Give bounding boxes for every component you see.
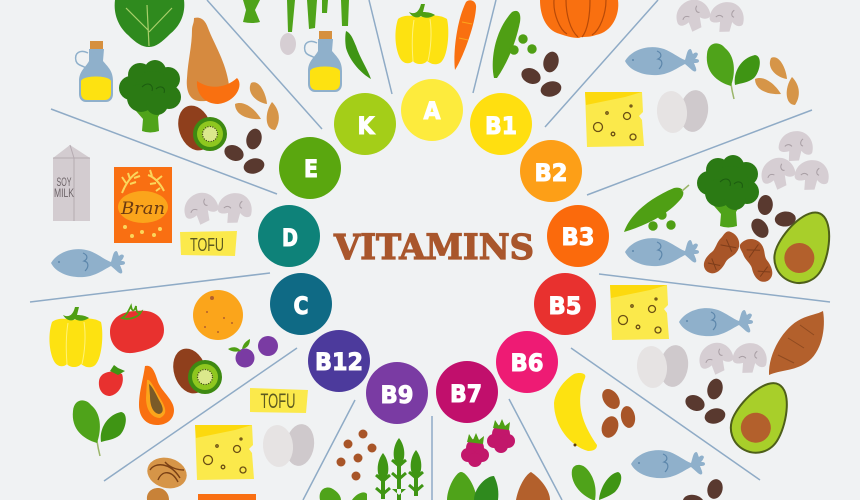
icon: mushroom top [777, 129, 815, 164]
icon: cheese [585, 92, 644, 147]
title: VITAMINS [333, 227, 534, 268]
icon: peanut left [699, 229, 745, 278]
icon: banana [554, 373, 597, 451]
icon: eggs [655, 88, 711, 134]
icon: eggs [635, 343, 691, 389]
icon: cheese [195, 425, 254, 480]
icon: brown seeds [336, 430, 376, 480]
vitamin K: K [358, 112, 376, 140]
icon: soy milk carton: SOY [56, 175, 72, 189]
icon: peas [648, 210, 676, 231]
icon: asparagus [376, 438, 423, 500]
vitamin C [270, 273, 332, 335]
icon: mushroom right [792, 157, 831, 194]
foods: vitamin K sector [243, 0, 371, 92]
icon: peas [509, 34, 537, 55]
vitamin A [401, 79, 463, 141]
icon: mushroom right [730, 340, 769, 377]
icon: sweet potato [769, 311, 824, 375]
icon: spinach [320, 488, 367, 500]
icon: spinach [707, 43, 760, 99]
vitamin C: C [294, 292, 308, 320]
icon: carrot [454, 0, 476, 70]
icon: tofu label: TOFU [260, 390, 296, 413]
vitamin circles [258, 79, 609, 424]
icon: raspberries [461, 419, 515, 467]
vitamin B6: B6 [510, 349, 544, 377]
icon: mushroom right [707, 0, 746, 36]
vitamin E: E [304, 155, 318, 183]
foods: vitamin B12 sector [144, 388, 317, 500]
foods: vitamin B1 sector [493, 0, 618, 99]
vitamin D: D [282, 224, 298, 252]
vitamin B1: B1 [485, 112, 517, 140]
icon: kiwi [173, 101, 227, 155]
foods: vitamin D sector [51, 145, 254, 277]
vitamin E [279, 137, 341, 199]
foods: vitamin C sector [49, 290, 278, 456]
icon: fish [679, 308, 753, 336]
icon: pea pod [624, 185, 689, 232]
icon: dark beans [519, 50, 563, 99]
vitamin B9 [366, 362, 428, 424]
icon: yellow pepper [395, 4, 448, 64]
icon: broccoli stem [243, 0, 260, 23]
icon: cheese [610, 285, 669, 340]
icon: fish [625, 47, 699, 75]
foods: vitamin B3 sector [624, 129, 843, 291]
foods: vitamin E sector [76, 0, 279, 176]
icon: dark beans [222, 127, 266, 176]
icon: dark beans [683, 377, 727, 426]
vitamin B5 [534, 273, 596, 335]
icon: dark beans [683, 477, 725, 500]
icon: bran box [114, 167, 172, 243]
vitamin B6 [496, 331, 558, 393]
icon: chili [345, 31, 371, 79]
icon: tofu label [180, 231, 237, 256]
foods: vitamin B7 sector [447, 419, 550, 500]
icon: pea pod [493, 11, 520, 78]
icon: mushroom left [696, 339, 737, 378]
icon: spinach [572, 465, 621, 500]
vitamin B5: B5 [548, 292, 582, 320]
icon: almonds [755, 57, 799, 105]
icon: soy milk carton: MILK [54, 186, 74, 200]
vitamin B7 [436, 361, 498, 423]
icon: mushroom left [673, 0, 714, 35]
icon: yellow pepper [49, 307, 102, 367]
vitamin D [258, 205, 320, 267]
foods: vitamin B6 sector [554, 373, 725, 500]
icon: orange [193, 290, 243, 340]
icon: broccoli [119, 60, 181, 132]
icon: blueberries [228, 336, 278, 368]
icon: avocado [722, 373, 801, 462]
icon: soy milk carton [53, 145, 90, 221]
icon: fish [51, 249, 125, 277]
icon: kiwi [168, 344, 222, 398]
vitamin A: A [424, 97, 441, 125]
icon: dark beans [740, 185, 801, 243]
icon: mushroom left [181, 189, 222, 228]
vitamin B2 [520, 140, 582, 202]
icon: chard leaves [447, 472, 498, 500]
icon: mushroom right [215, 190, 254, 227]
vitamin B9: B9 [380, 381, 414, 409]
icon: avocado [766, 203, 843, 291]
vitamin B12 [308, 330, 370, 392]
icon: fish [625, 238, 699, 266]
foods: vitamin B5 sector [610, 285, 824, 462]
icon: tofu label: TOFU [190, 235, 224, 255]
vitamin B3: B3 [562, 223, 594, 251]
vitamin B12: B12 [315, 348, 363, 376]
foods: vitamin B2 sector [585, 0, 799, 147]
vitamin B2: B2 [534, 159, 568, 187]
foods: vitamin A sector [395, 0, 476, 70]
icon: spinach [73, 400, 126, 456]
vitamin B3 [547, 205, 609, 267]
icon: eggs [261, 422, 317, 468]
icon: kidney beans [599, 386, 637, 440]
icon: fish [631, 450, 705, 478]
icon: tomato [110, 306, 164, 353]
icon: clam [144, 453, 190, 493]
foods: vitamin B9 sector [320, 430, 423, 500]
vitamin B7: B7 [450, 380, 482, 408]
icon: bran box top [198, 494, 256, 500]
icon: tofu label [250, 388, 308, 413]
icon: broccoli [697, 155, 759, 228]
icon: pumpkin [540, 0, 618, 38]
icon: mushroom left [758, 154, 799, 193]
icon: peanut right [738, 235, 777, 286]
icon: walnut [147, 488, 169, 500]
icon: sweet potato [516, 472, 550, 500]
icon: squash [187, 18, 240, 104]
icon: lettuce [115, 0, 184, 47]
icon: strawberry [99, 365, 125, 396]
icon: spring onions [280, 0, 349, 55]
vitamin B1 [470, 93, 532, 155]
vitamin K [334, 93, 396, 155]
icon: papaya [139, 366, 174, 425]
icon: oil bottle [76, 41, 113, 102]
icon: oil bottle [305, 31, 342, 92]
icon: almonds [235, 82, 279, 130]
